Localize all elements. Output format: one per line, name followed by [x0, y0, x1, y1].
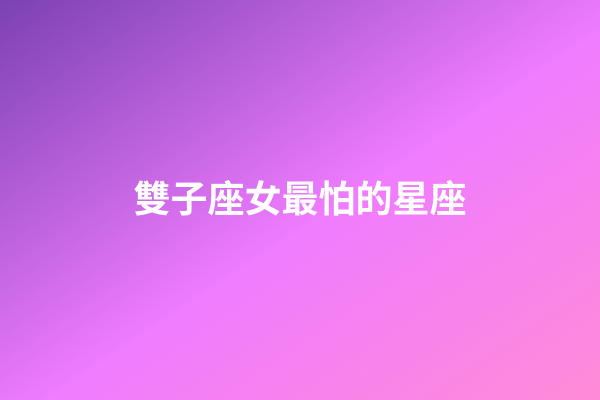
title: 雙子座女最怕的星座 — [134, 179, 466, 220]
